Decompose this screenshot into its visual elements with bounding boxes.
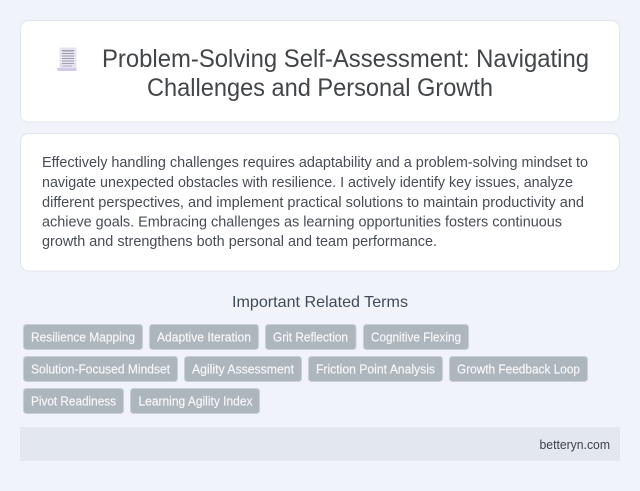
tag: Learning Agility Index — [138, 394, 253, 408]
heading: related terms: Important Related Terms — [232, 294, 408, 311]
tag: Friction Point Analysis — [316, 362, 435, 376]
tag — [24, 356, 178, 382]
tag: Cognitive Flexing — [371, 330, 461, 344]
panel: header card — [20, 20, 620, 122]
tag: Adaptive Iteration — [157, 330, 251, 344]
tag: Solution-Focused Mindset — [31, 362, 170, 376]
icon: document scroll — [57, 48, 76, 71]
tag: Grit Reflection — [273, 330, 348, 344]
tag — [24, 388, 124, 414]
tag — [308, 356, 442, 382]
tag: Resilience Mapping — [31, 330, 135, 344]
tags: related terms — [24, 324, 588, 414]
summary text: achieve goals. Embracing challenges as learning opportunities fosters continuous — [42, 214, 562, 230]
footer source: betteryn.com — [540, 437, 610, 452]
tag — [24, 324, 142, 350]
tag — [450, 356, 588, 382]
footer — [20, 427, 620, 461]
tag: Pivot Readiness — [31, 394, 116, 408]
summary text: growth and strengthens both personal and team performance. — [42, 234, 437, 250]
tag — [184, 356, 302, 382]
panel: summary card — [20, 134, 620, 271]
tag — [364, 324, 468, 350]
tag — [130, 388, 260, 414]
tag — [266, 324, 356, 350]
tag — [150, 324, 258, 350]
tag: Agility Assessment — [192, 362, 295, 376]
summary text: Effectively handling challenges requires adaptability and a problem-solving mindset to — [42, 155, 588, 171]
title — [102, 45, 589, 102]
summary text — [42, 155, 588, 250]
title: Challenges and Personal Growth — [147, 74, 493, 102]
summary text: different perspectives, and implement practical solutions to maintain productivity and — [42, 195, 584, 211]
title: Problem-Solving Self-Assessment: Navigating — [102, 45, 589, 73]
summary text: navigate unexpected obstacles with resilience. I actively identify key issues, analyze — [42, 175, 573, 191]
tag: Growth Feedback Loop — [457, 362, 580, 376]
